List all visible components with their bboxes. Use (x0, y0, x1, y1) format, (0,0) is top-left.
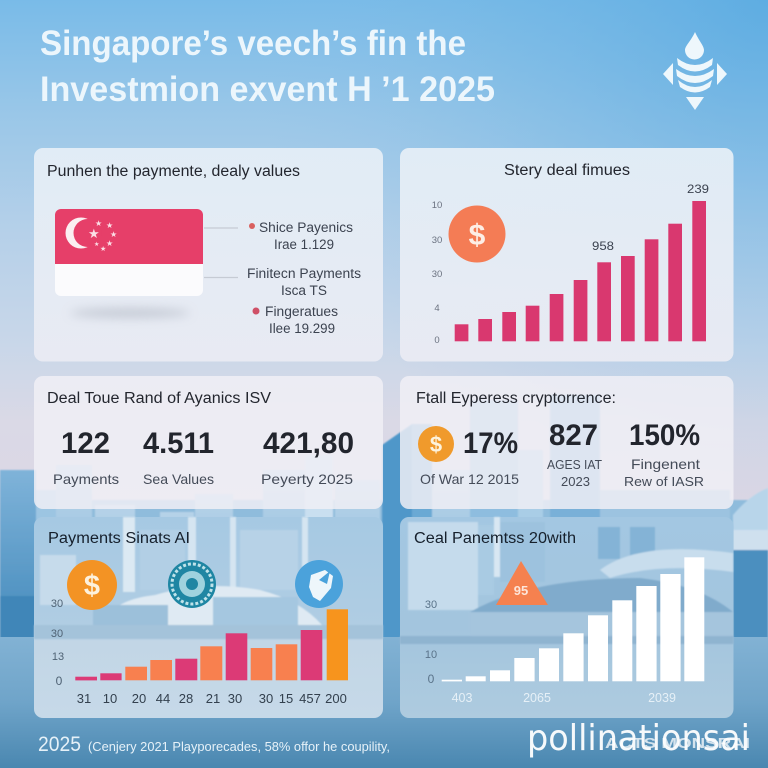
bar value labels: 958 (592, 239, 614, 253)
y axis labels: 30 (432, 235, 442, 246)
icon: globe (295, 560, 343, 608)
x axis labels: 457 (299, 691, 321, 706)
stat: 122 payments: Payments (53, 471, 119, 487)
panel: cryptocurrency stats (400, 376, 734, 509)
watermark: pollinationsai (527, 718, 750, 759)
y axis labels: 30 (51, 628, 63, 640)
heading: payment deal values: Punhen the paymente, dealy values (47, 163, 300, 180)
y axis labels: 4 (434, 303, 440, 314)
water (0, 637, 768, 768)
y axis labels: 0 (56, 674, 63, 688)
y axis labels: 0 (428, 672, 435, 686)
icon: gold coin (418, 426, 454, 462)
x axis labels: 2065 (523, 691, 551, 705)
legend item: Finitecn Payments: Isca TS (281, 283, 327, 298)
bar chart: payments (75, 609, 348, 680)
skyline behind chart (34, 517, 383, 639)
footer note (38, 733, 390, 756)
icon: teal badge (168, 560, 216, 608)
icon: Singapore flag: ★ (88, 226, 100, 241)
bar value labels (592, 182, 709, 253)
stat: 17%: 17% (463, 427, 518, 460)
stat: 150% (624, 419, 704, 489)
legend item: Shice Payenics: Irae 1.129 (274, 237, 334, 252)
legend item: Fingeratues: Fingeratues (265, 304, 338, 319)
stat: 150%: Fingenent (631, 456, 700, 472)
stat: 421,80 peyerty: Peyerty 2025 (261, 471, 353, 487)
heading: story deal figures: Stery deal fimues (504, 162, 630, 179)
icon: orange triangle: 95 (514, 583, 528, 598)
y axis labels: 30 (51, 598, 63, 610)
stat: 122 payments (53, 427, 119, 487)
legend item: Fingeratues (252, 304, 338, 336)
stat: 421,80 peyerty: 421,80 (263, 427, 354, 460)
legend item: Fingeratues: Ilee 19.299 (269, 321, 335, 336)
bar chart: growth (442, 557, 704, 681)
stat: 150%: Rew of IASR (624, 474, 704, 489)
stat: 4.511 sea values (143, 427, 214, 487)
icon: Singapore flag: ★ (95, 219, 102, 228)
footer note: 2025 (38, 733, 81, 756)
x axis labels: 30 (259, 691, 273, 706)
x axis labels (77, 691, 347, 706)
bar chart: deal figures (455, 201, 706, 341)
y axis labels (425, 599, 437, 686)
stat: 17% (420, 427, 519, 487)
stat: 17%: Of War 12 2015 (420, 471, 519, 487)
icon: orange dollar coin (67, 560, 117, 610)
stat: 827: AGES IAT (547, 457, 602, 472)
x axis labels: 44 (156, 691, 170, 706)
panel: payment deal values (34, 148, 383, 362)
icon: orange triangle (496, 561, 548, 605)
icon: Singapore flag: ★ (110, 230, 117, 239)
icon: Singapore flag: ★ (106, 239, 113, 248)
heading: payments stats: Payments Sinats AI (48, 530, 190, 547)
x axis labels: 2039 (648, 691, 676, 705)
icon: dollar coin (448, 206, 506, 262)
x axis labels: 31 (77, 691, 91, 706)
legend item: Finitecn Payments (247, 266, 361, 298)
legend item: Finitecn Payments: Finitecn Payments (247, 266, 361, 281)
title (40, 24, 495, 109)
panel: story deal figures (400, 148, 734, 362)
x axis labels: 200 (325, 691, 347, 706)
stat: 827: 827 (549, 419, 598, 452)
x axis labels: 30 (228, 691, 242, 706)
footer note: (Cenjery 2021 Playporecades, 58% offor he coupility, (88, 740, 390, 754)
bar value labels: 239 (687, 182, 709, 196)
panel: payments stats (34, 517, 383, 718)
y axis labels: 0 (434, 335, 440, 346)
y axis labels: 10 (425, 649, 437, 661)
x axis labels: 28 (179, 691, 193, 706)
stat: 827 (547, 419, 602, 489)
connector lines (204, 228, 238, 278)
arena and towers behind chart (400, 517, 734, 644)
shadow under flag (70, 308, 190, 318)
icon: Singapore flag (55, 209, 203, 296)
stat: 421,80 peyerty (261, 427, 354, 487)
y axis labels (432, 200, 442, 346)
icon: gold coin: $ (430, 432, 442, 457)
x axis labels: 21 (206, 691, 220, 706)
legend item: Shice Payenics: Shice Payenics (259, 220, 353, 235)
title: Investmion exvent H ’1 2025 (40, 70, 495, 109)
y axis labels: 30 (425, 599, 437, 611)
icon: orange dollar coin: $ (84, 570, 100, 602)
panel: deal total (34, 376, 383, 509)
watermark: ACTS MONSRAI (605, 735, 750, 752)
y axis labels: 30 (432, 269, 442, 280)
stat: 122 payments: 122 (61, 427, 110, 460)
x axis labels: 20 (132, 691, 146, 706)
heading: deal total: Deal Toue Rand of Ayanics ISV (47, 390, 272, 407)
y axis labels: 13 (52, 651, 64, 663)
stat: 827: 2023 (561, 474, 590, 489)
heading: deal payments growth: Ceal Panemtss 20with (414, 530, 576, 547)
stat: 150%: 150% (629, 419, 700, 452)
icon: Singapore flag: ★ (94, 241, 99, 248)
y axis labels: 10 (432, 200, 442, 211)
icon: dollar coin: $ (469, 219, 486, 252)
stat: 4.511 sea values: 4.511 (143, 427, 214, 460)
panel: deal payments growth (400, 517, 734, 718)
title: Singapore’s veech’s fin the (40, 24, 466, 63)
stat: 4.511 sea values: Sea Values (143, 471, 214, 487)
x axis labels: 15 (279, 691, 293, 706)
x axis labels: 403 (452, 691, 472, 705)
y axis labels (51, 598, 64, 688)
icon: Singapore flag: ★ (106, 221, 113, 230)
legend item: Shice Payenics (249, 220, 353, 252)
heading: cryptocurrency stats: Ftall Eyperess cryptorrence: (416, 390, 616, 407)
icon: logo emblem (663, 32, 727, 110)
x axis labels (452, 691, 676, 705)
x axis labels: 10 (103, 691, 117, 706)
icon: Singapore flag: ★ (100, 245, 106, 253)
